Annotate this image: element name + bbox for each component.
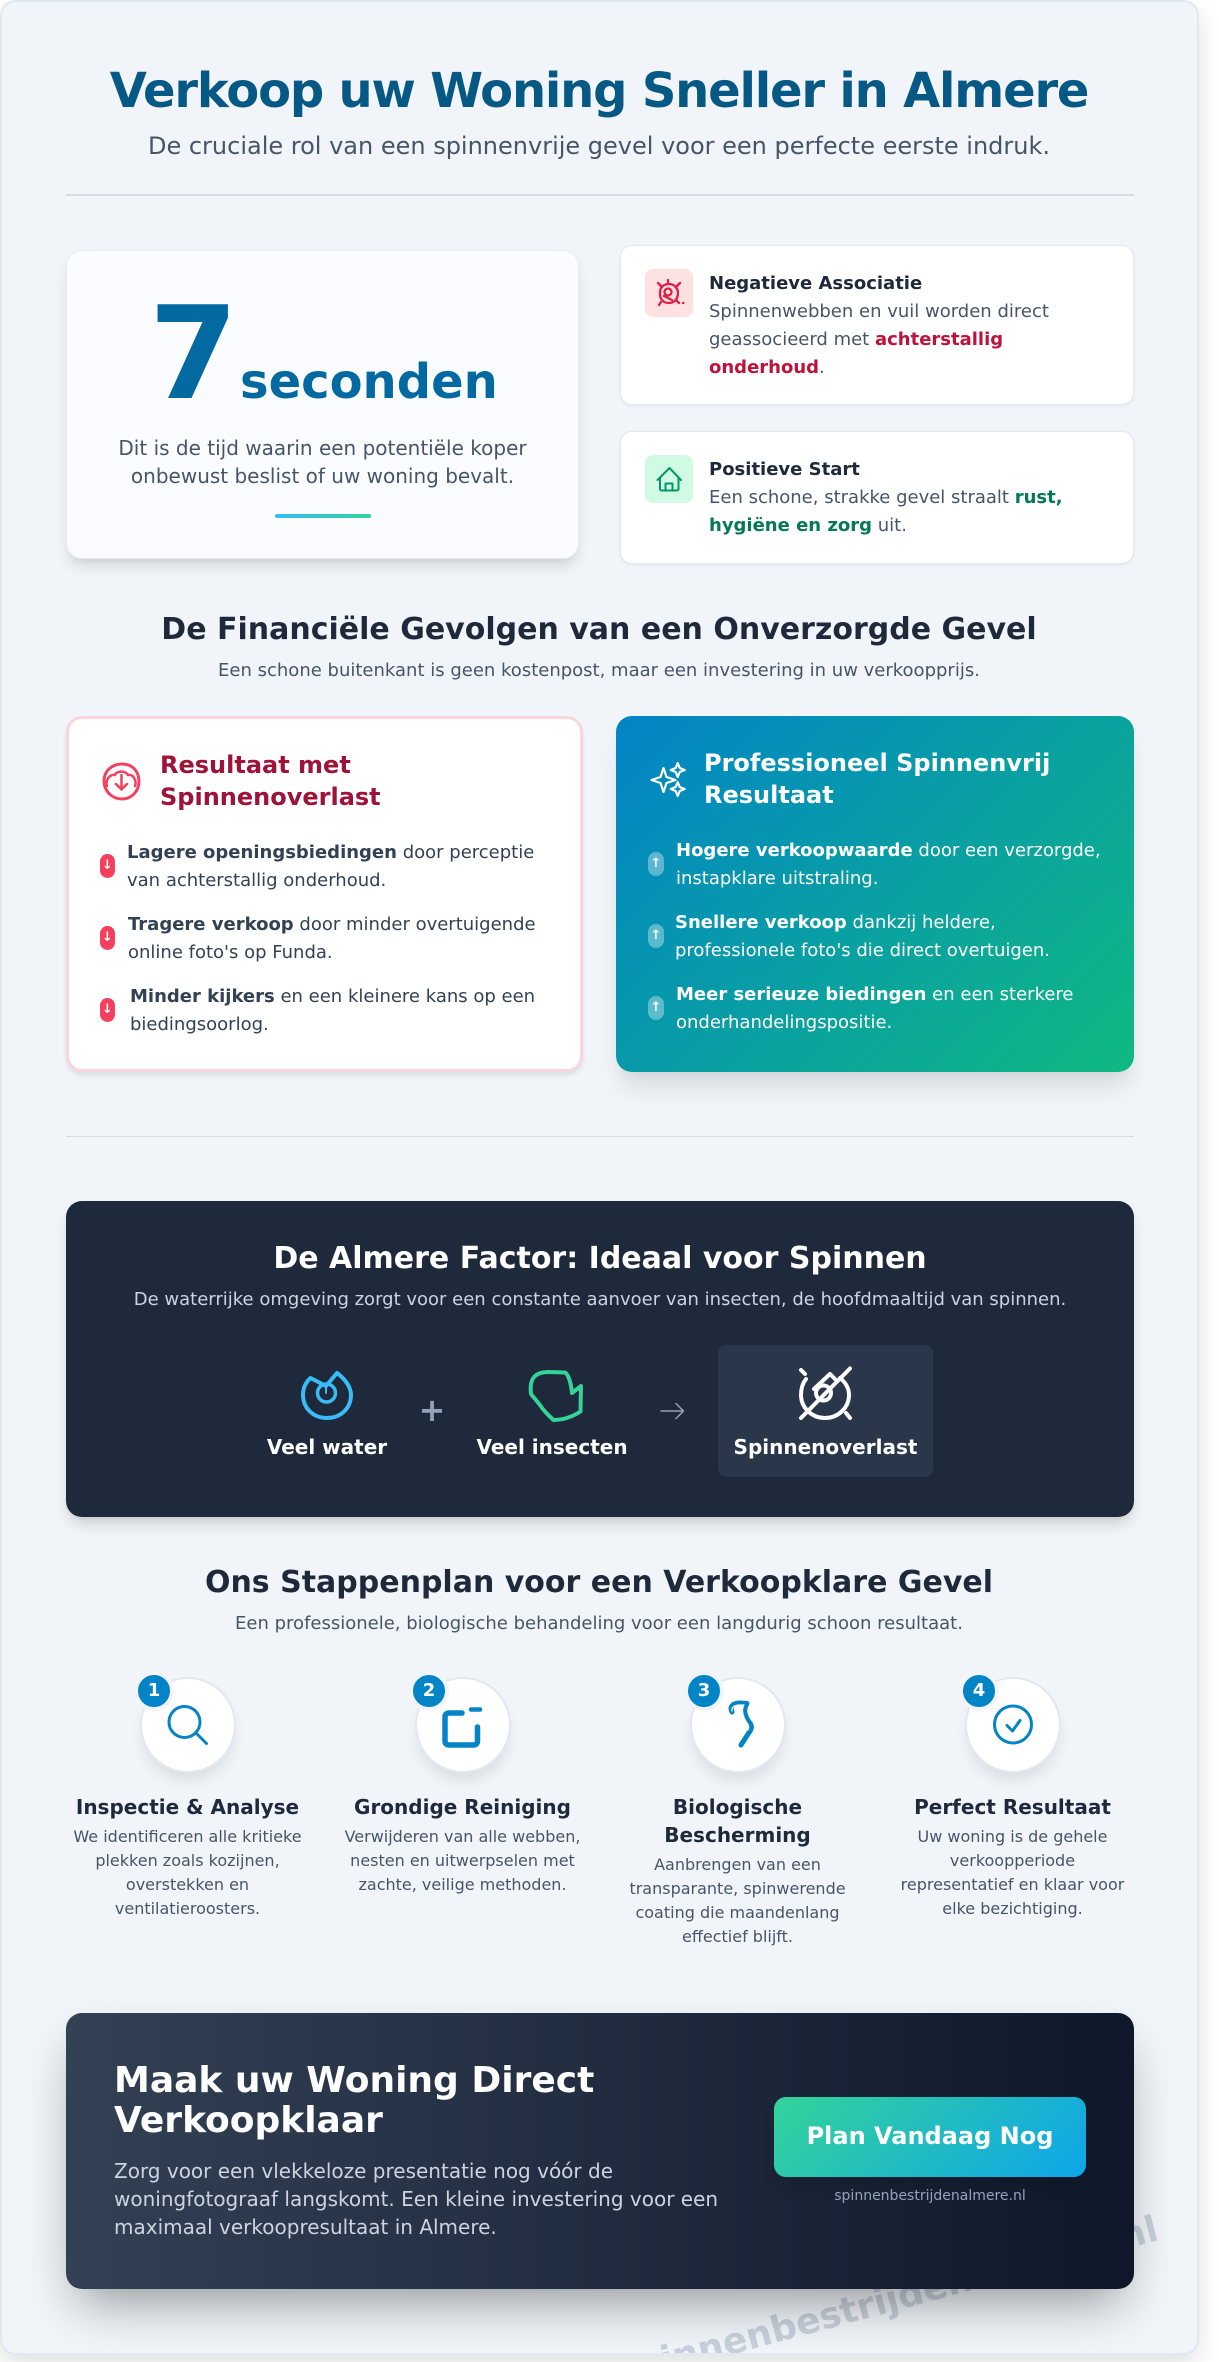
label: result: Spinnenoverlast bbox=[734, 1435, 917, 1459]
item 3: onderhandelingspositie. bbox=[676, 1012, 892, 1033]
badge bbox=[134, 1671, 174, 1711]
item 3: Meer serieuze biedingen en een sterkere bbox=[676, 984, 1074, 1005]
item 1: instapklare uitstraling. bbox=[676, 868, 878, 889]
step text: verkoopperiode bbox=[950, 1851, 1075, 1870]
negatieve text: Spinnenwebben en vuil worden direct bbox=[709, 301, 1049, 322]
step title: Biologische bbox=[673, 1795, 802, 1819]
item 3 bbox=[648, 984, 1074, 1033]
big number: 7 bbox=[149, 280, 238, 429]
accent bar bbox=[275, 514, 371, 518]
step text: Uw woning is de gehele bbox=[918, 1827, 1107, 1846]
step text: Verwijderen van alle webben, bbox=[345, 1827, 580, 1846]
step title bbox=[664, 1795, 811, 1847]
positieve text: hygiëne en zorg uit. bbox=[709, 515, 907, 536]
step title: Grondige Reiniging bbox=[354, 1795, 571, 1819]
item 2: online foto's op Funda. bbox=[128, 942, 333, 963]
subtitle: De cruciale rol van een spinnenvrije gevel voor een perfecte eerste indruk. bbox=[148, 132, 1050, 160]
icon: insect bbox=[528, 1370, 583, 1422]
item 2: Tragere verkoop door minder overtuigende bbox=[128, 914, 536, 935]
cta text: Zorg voor een vlekkeloze presentatie nog vóór de bbox=[114, 2159, 613, 2183]
icon: cloud down bbox=[102, 762, 140, 800]
item 1: ↑ bbox=[651, 856, 661, 871]
badge: 4 bbox=[973, 1680, 985, 1701]
cta heading: Maak uw Woning Direct bbox=[114, 2060, 594, 2101]
item 2: Snellere verkoop dankzij heldere, bbox=[675, 912, 996, 933]
item 3: biedingsoorlog. bbox=[130, 1014, 269, 1035]
badge bbox=[959, 1671, 999, 1711]
label: insect: Veel insecten bbox=[476, 1435, 628, 1459]
item 3: Minder kijkers en een kleinere kans op een bbox=[130, 986, 535, 1007]
cta text bbox=[114, 2159, 718, 2239]
step 4 bbox=[901, 1675, 1124, 1918]
badge bbox=[409, 1671, 449, 1711]
cta heading bbox=[114, 2060, 594, 2141]
panel: call to action bbox=[66, 2013, 1134, 2289]
negatieve text bbox=[709, 273, 1049, 378]
step text: coating die maandenlang bbox=[635, 1903, 840, 1922]
negatieve text: Negatieve Associatie bbox=[709, 273, 922, 294]
heading: financiele gevolgen: De Financiële Gevolgen van een Onverzorgde Gevel bbox=[161, 612, 1037, 647]
subheading: Een schone buitenkant is geen kostenpost, maar een investering in uw verkoopprijs. bbox=[218, 660, 980, 681]
step text: overstekken en bbox=[126, 1875, 249, 1894]
button bbox=[774, 2097, 1086, 2177]
cta heading: Verkoopklaar bbox=[114, 2100, 383, 2141]
icon: spider web warning bbox=[645, 269, 693, 317]
step title: Perfect Resultaat bbox=[914, 1795, 1111, 1819]
icon: no spider bbox=[798, 1366, 852, 1420]
title: Verkoop uw Woning Sneller in Almere bbox=[110, 63, 1088, 119]
label: water: Veel water bbox=[267, 1435, 387, 1459]
item 3: ↓ bbox=[102, 1002, 113, 1017]
item 1: Hogere verkoopwaarde door een verzorgde, bbox=[676, 840, 1101, 861]
panel: de almere factor bbox=[66, 1201, 1134, 1517]
step text bbox=[901, 1827, 1124, 1918]
subheading: Een professionele, biologische behandeling voor een langdurig schoon resultaat. bbox=[235, 1613, 963, 1634]
cta text: maximaal verkoopresultaat in Almere. bbox=[114, 2215, 497, 2239]
step title: Inspectie & Analyse bbox=[76, 1795, 299, 1819]
card title bbox=[160, 751, 381, 811]
step text: Aanbrengen van een bbox=[654, 1855, 821, 1874]
website: spinnenbestrijdenalmere.nl bbox=[834, 2188, 1026, 2204]
circle bbox=[690, 1677, 786, 1773]
icon: water bbox=[301, 1370, 353, 1420]
circle bbox=[965, 1677, 1061, 1773]
cta text: woningfotograaf langskomt. Een kleine investering voor een bbox=[114, 2187, 718, 2211]
badge: 1 bbox=[148, 1680, 160, 1701]
card title: Resultaat bbox=[704, 781, 834, 809]
button: Plan Vandaag Nog bbox=[807, 2122, 1053, 2150]
step text: plekken zoals kozijnen, bbox=[95, 1851, 280, 1870]
item 1: van achterstallig onderhoud. bbox=[127, 870, 386, 891]
item 3 bbox=[100, 986, 535, 1035]
step text: ventilatieroosters. bbox=[115, 1899, 260, 1918]
item 2 bbox=[100, 914, 536, 963]
step text: representatief en klaar voor bbox=[901, 1875, 1124, 1894]
step text bbox=[629, 1855, 846, 1946]
item 1: Lagere openingsbiedingen door perceptie bbox=[127, 842, 534, 863]
positieve text bbox=[709, 459, 1063, 536]
card title: Spinnenoverlast bbox=[160, 783, 381, 811]
step text: transparante, spinwerende bbox=[629, 1879, 846, 1898]
item 1 bbox=[648, 840, 1101, 889]
icon: protection bbox=[728, 1700, 754, 1748]
arrow bbox=[660, 1402, 684, 1420]
icon: brush corner bbox=[442, 1707, 482, 1748]
panel: positieve start bbox=[620, 431, 1134, 564]
heading: De Almere Factor: Ideaal voor Spinnen bbox=[273, 1241, 927, 1276]
item 3: ↑ bbox=[651, 1000, 661, 1015]
badge bbox=[684, 1671, 724, 1711]
positieve text: Een schone, strakke gevel straalt rust, bbox=[709, 487, 1063, 508]
card title bbox=[704, 749, 1050, 809]
step title: Bescherming bbox=[664, 1823, 811, 1847]
description bbox=[118, 436, 527, 488]
circle bbox=[140, 1677, 236, 1773]
item 2: ↓ bbox=[102, 930, 113, 945]
icon: house bbox=[645, 455, 693, 503]
panel: negatieve associatie bbox=[620, 245, 1134, 405]
step text: elke bezichtiging. bbox=[942, 1899, 1083, 1918]
item 1 bbox=[100, 842, 534, 891]
card title: Resultaat met bbox=[160, 751, 351, 779]
negatieve text: geassocieerd met achterstallig bbox=[709, 329, 1003, 350]
badge: 3 bbox=[698, 1680, 710, 1701]
step 1 bbox=[73, 1675, 302, 1918]
step 2 bbox=[344, 1675, 580, 1894]
heading: stappenplan: Ons Stappenplan voor een Verkoopklare Gevel bbox=[205, 1565, 993, 1600]
unit: seconden bbox=[240, 354, 498, 410]
step text: nesten en uitwerpselen met bbox=[350, 1851, 575, 1870]
step text bbox=[344, 1827, 580, 1894]
step 3 bbox=[629, 1675, 846, 1946]
panel: 7 seconden bbox=[66, 250, 579, 559]
badge: 2 bbox=[423, 1680, 435, 1701]
step text bbox=[73, 1827, 302, 1918]
icon: check bbox=[993, 1704, 1033, 1744]
icon: sparkles bbox=[650, 762, 686, 798]
step text: zachte, veilige methoden. bbox=[358, 1875, 567, 1894]
result box bbox=[718, 1345, 933, 1477]
description: Dit is de tijd waarin een potentiële koper bbox=[118, 436, 527, 460]
step text: We identificeren alle kritieke bbox=[73, 1827, 302, 1846]
icon: magnifier bbox=[168, 1705, 208, 1746]
positieve text: Positieve Start bbox=[709, 459, 860, 480]
item 2: professionele foto's die direct overtuigen. bbox=[675, 940, 1050, 961]
card title: Professioneel Spinnenvrij bbox=[704, 749, 1050, 777]
panel: professioneel resultaat bbox=[616, 716, 1134, 1072]
plus: + bbox=[419, 1391, 445, 1429]
description: onbewust beslist of uw woning bevalt. bbox=[131, 464, 514, 488]
description: De waterrijke omgeving zorgt voor een constante aanvoer van insecten, de hoofdmaaltijd van spinnen. bbox=[134, 1289, 1066, 1310]
step text: effectief blijft. bbox=[682, 1927, 793, 1946]
item 1: ↓ bbox=[102, 858, 113, 873]
negatieve text: onderhoud. bbox=[709, 357, 825, 378]
item 2 bbox=[648, 912, 1050, 961]
panel: resultaat met spinnenoverlast bbox=[66, 716, 583, 1072]
circle bbox=[415, 1677, 511, 1773]
item 2: ↑ bbox=[651, 928, 661, 943]
